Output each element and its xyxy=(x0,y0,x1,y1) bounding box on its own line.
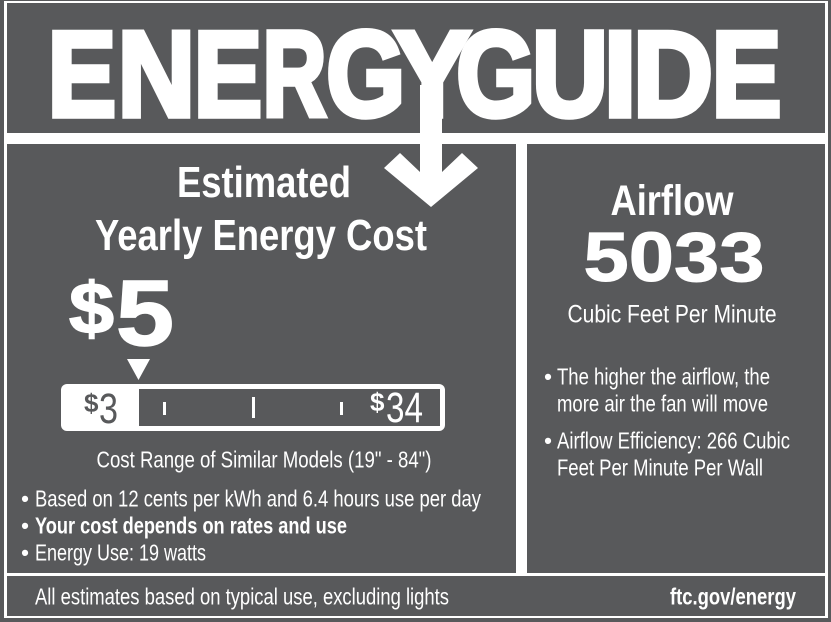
bullet list: cost notes: • xyxy=(21,512,29,538)
title: EnergyGuide: Y xyxy=(394,6,471,142)
range minimum xyxy=(84,385,118,433)
bullet list: cost notes: Based on 12 cents per kWh and 6.4 hours use per day xyxy=(35,486,481,512)
bullet list: airflow notes xyxy=(544,364,790,480)
icon: pointer triangle xyxy=(127,359,150,380)
airflow unit: Cubic Feet Per Minute xyxy=(568,300,776,328)
bullet list: airflow notes: Feet Per Minute Per Wall xyxy=(557,454,763,480)
icon: arrow from title down xyxy=(384,85,478,207)
title: EnergyGuide: E xyxy=(194,6,262,142)
title: EnergyGuide: I xyxy=(604,6,637,142)
airflow value: 5033 xyxy=(584,218,764,296)
title: EnergyGuide: G xyxy=(326,6,405,142)
bullet list: cost notes xyxy=(21,486,481,566)
panel: airflow xyxy=(527,144,825,573)
range maximum xyxy=(370,384,423,432)
range caption: Cost Range of Similar Models (19" - 84") xyxy=(96,446,432,472)
heading: Yearly Energy Cost: Yearly Energy Cost xyxy=(95,211,427,260)
heading: Airflow: Airflow xyxy=(610,177,734,225)
panel: header xyxy=(7,3,825,133)
cost range bar xyxy=(61,384,445,433)
footer link: ftc.gov/energy xyxy=(670,584,796,610)
title: EnergyGuide: G xyxy=(456,6,535,142)
panel: estimated yearly energy cost xyxy=(7,144,516,573)
bullet list: airflow notes: more air the fan will move xyxy=(557,390,768,416)
tick marks xyxy=(163,397,343,418)
bullet list: cost notes: • xyxy=(21,540,29,566)
range minimum: 3 xyxy=(99,385,118,433)
bullet list: airflow notes: • xyxy=(544,364,552,390)
bullet list: cost notes: Energy Use: 19 watts xyxy=(35,540,206,566)
cost value: 5 xyxy=(116,261,174,365)
panel: footer xyxy=(7,576,825,616)
cost value xyxy=(69,261,174,365)
title: EnergyGuide xyxy=(48,6,782,142)
bullet list: cost notes: Your cost depends on rates and use xyxy=(35,512,347,538)
title: EnergyGuide: U xyxy=(532,6,608,142)
bullet list: airflow notes: The higher the airflow, the xyxy=(557,364,770,390)
range maximum: $ xyxy=(370,387,385,417)
title: EnergyGuide: E xyxy=(48,6,116,142)
title: EnergyGuide: R xyxy=(262,6,326,142)
cost value: $ xyxy=(69,269,114,349)
title: EnergyGuide: D xyxy=(633,6,713,142)
title: EnergyGuide: N xyxy=(118,6,195,142)
range maximum: 34 xyxy=(386,384,423,432)
title: EnergyGuide: E xyxy=(712,6,782,142)
bullet list: cost notes: • xyxy=(21,486,29,512)
footer note: All estimates based on typical use, excluding lights xyxy=(35,584,449,610)
bullet list: airflow notes: • xyxy=(544,428,552,454)
heading: Estimated: Estimated xyxy=(177,158,351,207)
range minimum: $ xyxy=(84,388,99,418)
